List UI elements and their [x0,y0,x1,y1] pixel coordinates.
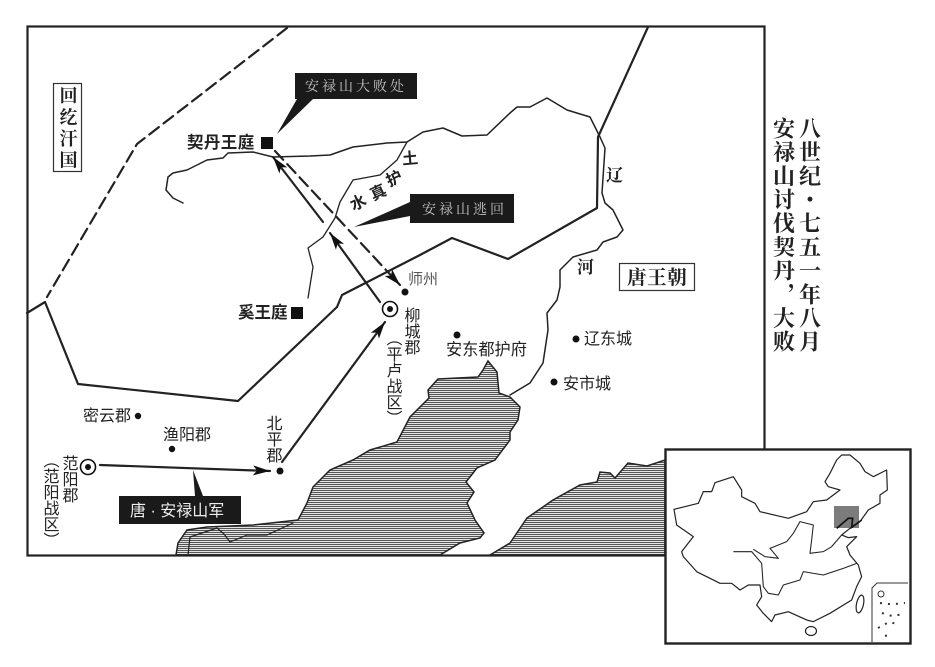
label: Tang dynasty [620,264,694,290]
place: Shizhou: 师州 [408,271,438,288]
Yellow River line [753,522,842,558]
sea: Bohai gulf west [176,361,520,555]
place: Andong protectorate [446,332,527,359]
coastal river inside sea [188,523,293,555]
place: Liucheng commandery [382,302,420,426]
place: Miyun commandery: 密云郡 [83,407,131,425]
place: Liucheng commandery: （平卢战区） [384,330,402,426]
panel: main map frame [28,26,764,556]
region label: Shuizhen Hu soil: 土 [401,149,419,169]
Yangtze River line [733,552,857,595]
river label: Liao: 辽 [606,166,623,185]
label: Tang dynasty: 唐王朝 [627,266,687,289]
Taiwan [855,594,865,614]
place: Xi court: 奚王庭 [238,302,288,322]
place: Xi court [238,302,303,322]
China outline [674,455,887,622]
place: Shizhou [402,271,438,296]
Hainan [806,626,816,636]
South China Sea sub-map [872,583,908,642]
callout: defeat site: 安禄山大败处 [305,78,407,95]
place: Beiping commandery [264,415,284,474]
place: Liaodong city: 辽东城 [584,330,632,348]
place: Andong protectorate: 安东都护府 [446,341,527,359]
place: Anshi city: 安市城 [563,375,611,393]
dashed boundary: Uyghur Khaganate [47,28,287,297]
region label: Shuizhen Hu soil [347,149,419,214]
panel: inset locator map of China [666,450,910,644]
place: Fanyang commandery: （范阳战区） [40,452,60,548]
title: 八世纪・七五一年八月 [796,117,822,354]
highlighted route line [837,518,862,528]
place: Yuyang commandery [163,426,211,452]
place: Khitan court: 契丹王庭 [187,132,255,152]
sea: Yellow Sea east [490,460,665,555]
callout: defeat site [277,73,417,134]
region label: Shuizhen Hu soil: 水 [347,191,369,214]
arrows: Tang army advance [100,157,385,471]
river: Liao river and upper course [166,98,623,395]
place: Fanyang commandery: 范阳郡 [60,455,78,503]
title [770,117,822,354]
label: Uyghur Khaganate [54,84,82,172]
callout: Tang army: 唐 · 安禄山军 [130,502,224,520]
callout: Tang army [119,470,241,524]
Tang border line [27,27,648,401]
river: tributary [308,142,407,298]
callout: retreat [354,194,514,227]
place: Yuyang commandery: 渔阳郡 [163,426,211,444]
place: Fanyang commandery [40,452,96,548]
place: Liucheng commandery: 柳城郡 [402,307,420,355]
place: Beiping commandery: 北平郡 [264,415,282,463]
arrow: dashed retreat [275,151,400,285]
label: Uyghur Khaganate: 回纥汗国 [58,86,78,172]
region label: Shuizhen Hu soil: 护 [383,167,405,190]
callout: retreat: 安禄山逃回 [422,202,507,218]
title: 安禄山讨伐契丹，大败 [770,117,796,354]
river label: He: 河 [577,258,594,277]
highlighted region square [834,506,859,528]
region label: Shuizhen Hu soil: 真 [367,181,389,204]
